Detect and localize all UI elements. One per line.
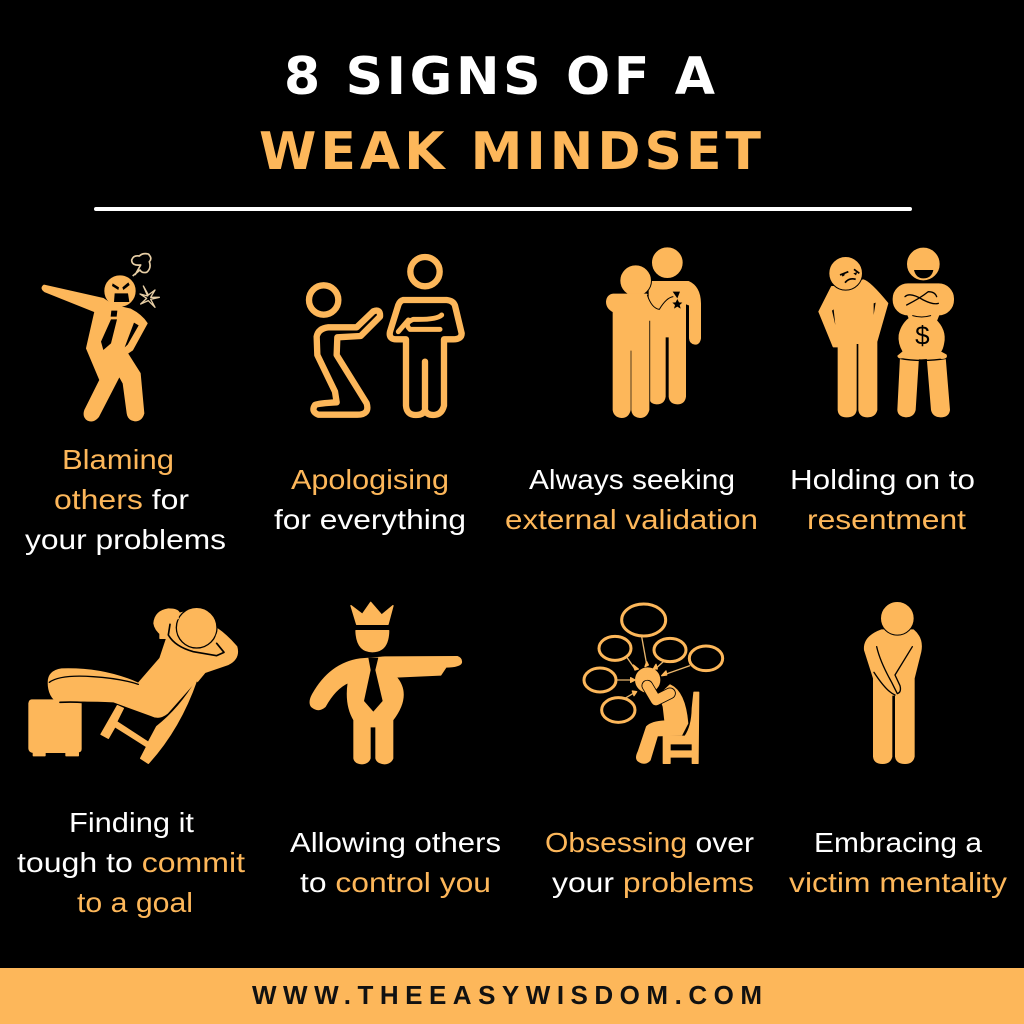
label: your problems <box>552 867 754 898</box>
label: Holding on to <box>790 464 975 495</box>
label: your problems <box>25 524 226 555</box>
label: to a goal <box>77 887 193 918</box>
label: Apologising <box>291 464 449 495</box>
label: victim mentality <box>789 867 1007 898</box>
panel: blaming others <box>25 254 226 555</box>
label: Embracing a <box>814 827 982 858</box>
icon: reclining man with feet on stool <box>29 607 237 763</box>
label <box>790 464 975 535</box>
icon: frowning man and laughing man with money bag: $ <box>915 320 930 350</box>
icon: head-bowed standing figure <box>865 601 921 763</box>
label: to control you <box>300 867 491 898</box>
label: Allowing others <box>290 827 501 858</box>
footer banner: WWW.THEEASYWISDOM.COM <box>252 980 762 1010</box>
label <box>505 464 758 535</box>
label: Always seeking <box>529 464 735 495</box>
icon: frowning man and laughing man with money bag <box>819 248 953 417</box>
label: tough to commit <box>17 847 245 878</box>
icon: kneeling and standing figures <box>309 257 462 415</box>
label <box>17 807 245 918</box>
title: 8 SIGNS OF A <box>284 47 715 107</box>
label <box>789 827 1007 898</box>
title: WEAK MINDSET <box>259 122 762 182</box>
label: resentment <box>807 504 966 535</box>
label: Blaming <box>62 444 174 475</box>
panel: resentment <box>790 248 975 535</box>
panel: apologising <box>274 257 466 535</box>
label <box>274 464 466 535</box>
label: for everything <box>274 504 466 535</box>
icon: crowned man pointing <box>310 602 461 764</box>
label <box>545 827 754 898</box>
icon: seated man surrounded by thought bubbles <box>584 604 723 763</box>
panel: control <box>290 602 501 898</box>
icon: figure pinning medal on another <box>607 248 700 420</box>
title <box>259 47 762 182</box>
panel: external validation <box>505 248 758 535</box>
icon: angry pointing man <box>42 254 159 421</box>
label: external validation <box>505 504 758 535</box>
label: Finding it <box>69 807 194 838</box>
label <box>25 444 226 555</box>
footer banner <box>0 968 1024 1024</box>
label <box>290 827 501 898</box>
label: others for <box>54 484 189 515</box>
label: Obsessing over <box>545 827 754 858</box>
panel: commit to a goal <box>17 607 245 918</box>
panel: victim mentality <box>789 601 1007 898</box>
panel: obsessing <box>545 604 754 898</box>
